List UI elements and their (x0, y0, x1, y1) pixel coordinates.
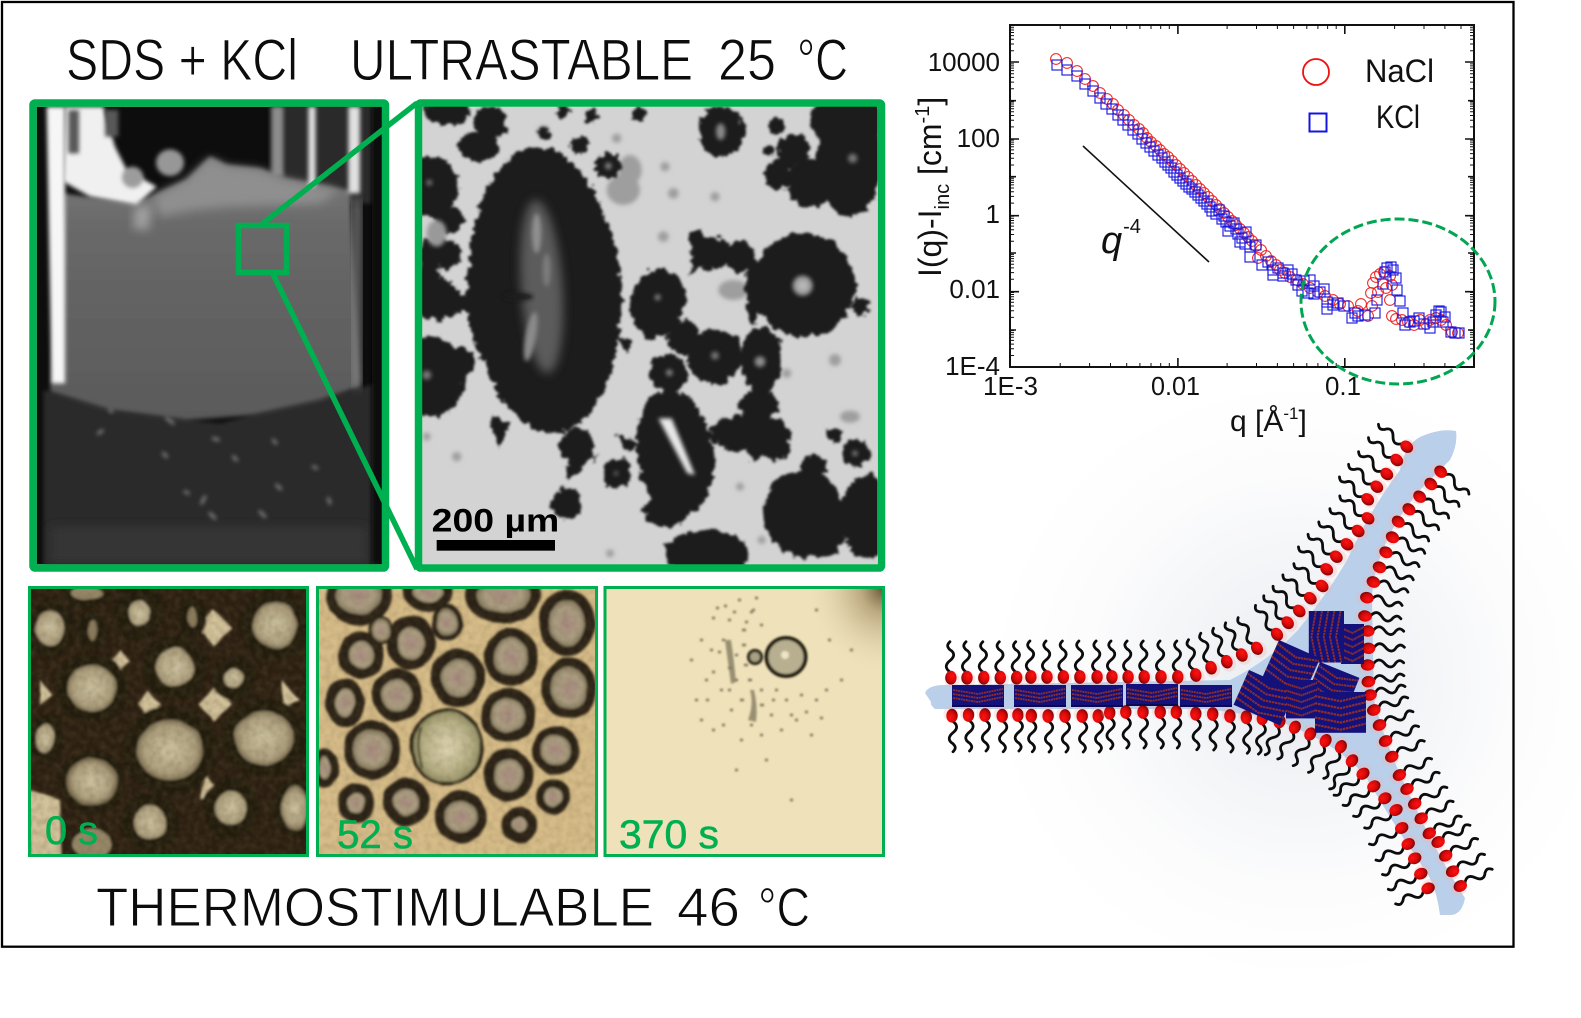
particles in the lower layer (98, 410, 330, 518)
grey smudges (423, 126, 860, 557)
y tick labels: 100 (957, 123, 1000, 153)
lower drained liquid layer (43, 383, 377, 567)
bright reflection on glass and foam top (47, 107, 65, 383)
chart: scattering intensity versus q (912, 25, 1495, 438)
legend: NaCl (1303, 53, 1434, 89)
title: SDS + KCl: SDS + KCl (66, 28, 298, 93)
time label 370 s: 370 s (619, 813, 719, 857)
large smooth bubble (412, 710, 482, 784)
y tick labels: 10000 (928, 47, 1000, 77)
y axis title: I(q)-I (912, 209, 948, 277)
heading: thermostimulable 46 °C: 46 (677, 876, 740, 938)
foam column (50, 157, 360, 420)
debris specks (690, 598, 853, 800)
legend: KCl: KCl (1376, 99, 1420, 135)
mottled texture (29, 587, 309, 857)
dashed highlight ellipse (1301, 219, 1495, 384)
right glass tones (270, 103, 373, 203)
title: ultrastable 25 °C: ULTRASTABLE (350, 28, 693, 93)
frame (605, 588, 884, 856)
microscopy frame (418, 103, 882, 568)
dark foam aggregates (422, 106, 878, 564)
right-hand glass reflections (272, 107, 283, 177)
x tick labels: 1E-3 (983, 371, 1038, 401)
small satellite bubble (748, 650, 762, 664)
scale bar (437, 540, 555, 551)
scale label: 200 µm (432, 503, 559, 539)
heading: thermostimulable 46 °C: °C (758, 876, 810, 938)
water channel (925, 430, 1465, 915)
soft glow behind lipid diagram (990, 380, 1581, 980)
y tick labels (928, 47, 1000, 381)
x axis title: -1 (1283, 404, 1298, 423)
x tick labels: 0.1 (1325, 371, 1361, 401)
surfactants: right row (1354, 460, 1496, 898)
light highlights inside aggregates (422, 123, 858, 476)
vial frame (33, 103, 386, 568)
panel: foam microscopy image (395, 98, 897, 577)
surfactants: lower row (944, 702, 1440, 909)
panel: foam vial photograph (33, 103, 417, 569)
surviving bubble (766, 638, 806, 676)
y tick labels: 0.01 (949, 274, 1000, 304)
bubbles (30, 582, 312, 861)
frame (30, 588, 308, 856)
bubbles (315, 570, 592, 838)
x axis title: ] (1298, 405, 1307, 438)
pale gaps between bubbles (30, 610, 300, 856)
y axis title: ] (912, 97, 948, 106)
data series: KCl (1057, 65, 1459, 333)
y tick labels: 1E-4 (945, 351, 1000, 381)
x tick labels: 0.01 (1151, 371, 1200, 401)
frame (318, 588, 596, 856)
panel: 52 s bubbles (315, 570, 597, 857)
slope label: q (1101, 220, 1122, 262)
crystal aggregate at the junction (1234, 611, 1366, 733)
y axis title: [cm (912, 123, 948, 184)
legend: NaCl: NaCl (1365, 53, 1434, 89)
zoom connector lines (262, 103, 417, 569)
panel: 370 s bubbles (604, 587, 884, 857)
y axis title: -1 (912, 106, 934, 123)
y tick labels: 1 (986, 199, 1000, 229)
time label 52 s: 52 s (337, 813, 413, 857)
panel: 0 s bubbles (29, 582, 312, 861)
plot frame and ticks (1010, 25, 1474, 367)
legend: KCl (1310, 99, 1420, 135)
pale band at foam top (153, 158, 340, 217)
mottled texture (317, 587, 597, 857)
inset square marker (238, 226, 286, 272)
surfactants: upper row (944, 417, 1420, 688)
time label 0 s: 0 s (45, 809, 98, 853)
data series: NaCl (1056, 59, 1458, 333)
title: ultrastable 25 °C: °C (797, 28, 848, 93)
light streak inside the large aggregate (515, 199, 568, 375)
title: ultrastable 25 °C: 25 (718, 28, 776, 93)
x axis title: q [Å (1230, 405, 1283, 438)
heading: thermostimulable 46 °C: THERMOSTIMULABLE (96, 876, 654, 938)
slope label: -4 (1123, 216, 1141, 238)
crystal slabs in the channel (952, 684, 1232, 707)
slope line q^-4 (1083, 146, 1209, 262)
y axis title: inc (932, 184, 954, 209)
diagram: plateau border with surfactant and crystals (925, 417, 1496, 915)
x tick labels (983, 371, 1361, 401)
